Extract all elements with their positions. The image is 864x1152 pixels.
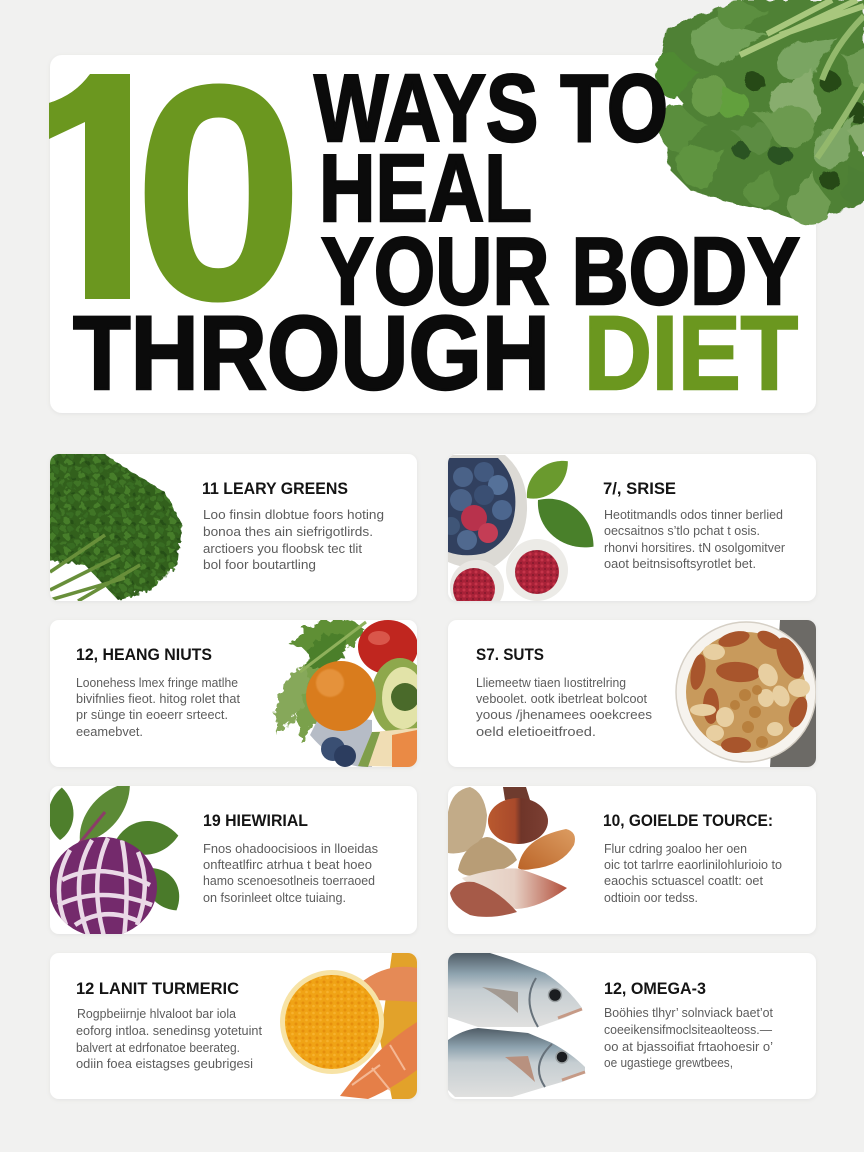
card 7: turmeric — [50, 953, 417, 1099]
card 4: nuts — [448, 620, 816, 767]
icon: bowl of blueberries with leaves — [448, 455, 594, 601]
icon: red cabbage with leaves — [50, 786, 180, 934]
body text — [604, 1006, 773, 1070]
body text — [76, 1007, 262, 1071]
body text: Loo finsin dlobtue foors hoting — [203, 508, 384, 522]
body text: oeld eletioeitfroed. — [476, 725, 596, 739]
heading: 11 LEARY GREENS — [202, 479, 348, 498]
body text: oecsaitnos s’tlo pchat t osis. — [604, 524, 760, 538]
body text: bonoa thes ain siefrigotlirds. — [203, 525, 373, 539]
title line: through: THROUGH — [73, 295, 550, 412]
icon: two fish — [448, 953, 585, 1097]
title digit 0: 0 — [133, 21, 304, 365]
body text: Rogpbeiirnje hlvaloot bar iola — [77, 1007, 236, 1021]
heading: 10, GOIELDE TOURCE: — [603, 811, 773, 830]
body text: hamo scenoesotlneis toerraoed — [203, 874, 375, 888]
heading: S7. SUTS — [476, 645, 544, 664]
icon: ginger, nuts and fish fillet — [448, 787, 575, 917]
body text — [203, 508, 384, 572]
body text: oic tot tarlrre eaorlinilohlurioio to — [604, 858, 782, 872]
body text: Heotitmandls odos tinner berlied — [604, 508, 783, 522]
body text: on fsorinleet oltce tuiaing. — [203, 891, 346, 905]
body text: Lliemeetw tiaen lıostitrelring — [476, 676, 626, 690]
body text: veboolet. ootk ibetrleat bolcoot — [476, 692, 648, 706]
body text: eoforg intloa. senedinsg yotetuint — [76, 1024, 262, 1038]
body text — [476, 676, 652, 739]
body text: bivifnlies fieot. hitog rolet that — [76, 692, 240, 706]
body text — [604, 508, 785, 571]
body text: odtioin oor tedss. — [604, 891, 698, 905]
title line: heal: HEAL — [319, 135, 532, 242]
body text: oo at bjassoifiat frtaohoesir o’ — [604, 1040, 773, 1054]
title text — [49, 73, 800, 392]
body text: yoous /jhenamees ooekcrees — [476, 708, 652, 722]
heading: 7/, SRISE — [603, 479, 676, 498]
heading: 12, HEANG NIUTS — [76, 645, 212, 664]
body text — [604, 842, 782, 905]
body text: Fnos ohadoocisioos in lloeidas — [203, 842, 378, 856]
body text — [203, 842, 378, 905]
body text: rhonvi horsitires. tN osolgomitver — [604, 541, 785, 555]
icon: fruit and vegetables — [272, 620, 417, 767]
body text: eeamebvet. — [76, 725, 143, 739]
heading: 19 HIEWIRIAL — [203, 811, 308, 830]
body text: balvert at edrfonatoe beerateg. — [76, 1041, 240, 1055]
body text: bol foor boutartling — [203, 558, 316, 572]
body text: pr sünge tin eoeerr srteect. — [76, 708, 228, 722]
body text: odiin foea eistagses geubrigesi — [76, 1057, 253, 1071]
card 5: herbal — [50, 786, 417, 934]
heading: 12, OMEGA-3 — [604, 979, 706, 998]
card 8: omega-3 — [448, 953, 816, 1099]
card 2: berries — [448, 454, 816, 602]
body text: Boöhies tlhyr’ solnviack baet’ot — [604, 1006, 773, 1020]
body text: onfteatlfirc atrhua t beat hoeo — [203, 858, 372, 872]
body text: oaot beitnsisoftsyrotlet bet. — [604, 557, 756, 571]
icon: leafy greens corner photo — [653, 0, 864, 227]
body text: Flur cdring ȝoaloo her oen — [604, 842, 747, 856]
heading: 12 LANIT TURMERIC — [76, 979, 239, 998]
body text: Loonehess lmex fringe matlhe — [76, 676, 238, 690]
body text: coeeikensifmoclsiteaolteoss.— — [604, 1023, 772, 1037]
body text: eaochis sctuascel coatlt: oet — [604, 874, 763, 888]
body text: oe ugastiege grewtbees, — [604, 1056, 733, 1070]
panel: title header — [50, 55, 816, 413]
card 3: healing fruits — [50, 610, 429, 767]
body text — [76, 676, 240, 739]
title digit 1: 1 — [10, 5, 191, 368]
card 6: golden sources — [448, 786, 816, 934]
body text: arctioers you floobsk tec tlit — [203, 542, 363, 556]
icon: citrus, turmeric and salmon — [280, 953, 417, 1099]
icon: bowl of mixed nuts — [676, 620, 816, 767]
title line: ways to: WAYS TO — [314, 55, 668, 162]
card 1: leafy greens — [44, 448, 417, 601]
icon: curly kale — [44, 448, 182, 601]
title word: diet: DIET — [584, 295, 798, 412]
